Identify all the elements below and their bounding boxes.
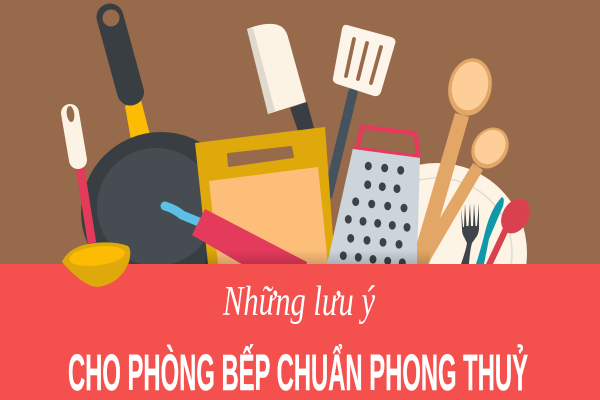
- subtitle: Những lưu ý: [222, 279, 375, 325]
- icon: rolling pin: [165, 206, 307, 266]
- icon: ladle: [62, 106, 130, 287]
- icon: table knife: [476, 197, 504, 264]
- icon: wooden spoons: [417, 54, 516, 264]
- icon: cutting board: [195, 127, 335, 264]
- icon: red spoon: [486, 198, 530, 264]
- grater holes: [340, 162, 410, 267]
- banner: [0, 106, 600, 400]
- shadow above banner: [205, 253, 430, 264]
- icon: grater: [327, 127, 421, 267]
- icon: knife: [247, 24, 314, 131]
- icon: plate: [418, 163, 527, 264]
- kitchen utensils illustration: [81, 4, 530, 264]
- icon: fork: [461, 203, 479, 264]
- icon: frying pan: [81, 4, 208, 264]
- icon: spatula: [328, 25, 396, 195]
